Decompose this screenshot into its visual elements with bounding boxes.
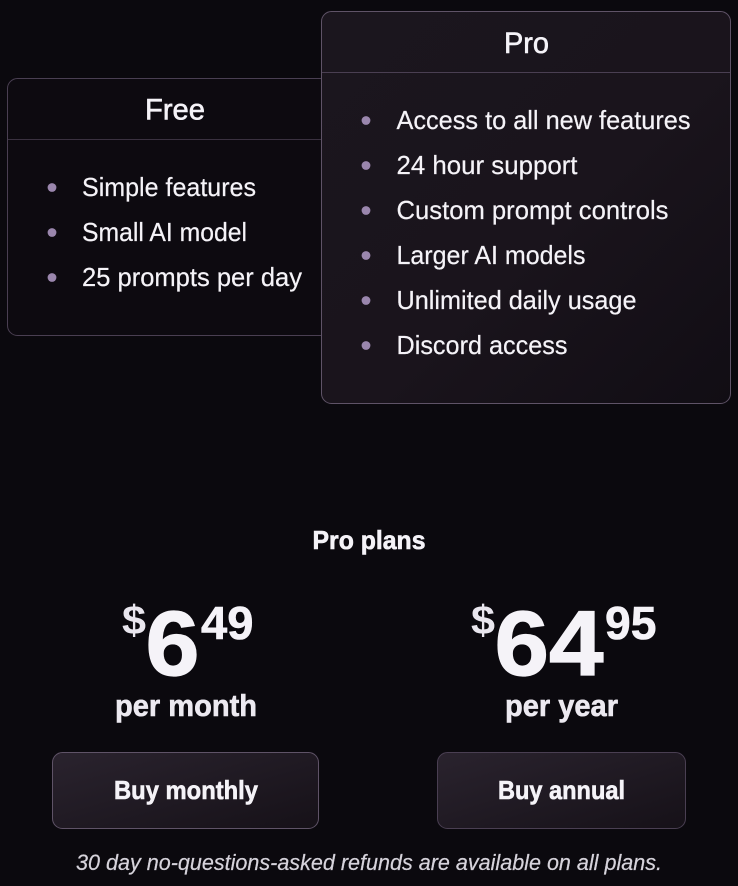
- price: annual: $: [471, 597, 495, 643]
- pro features list: Custom prompt controls: [396, 195, 668, 225]
- free features list: Simple features: [82, 172, 256, 202]
- label: per year: per year: [505, 688, 618, 723]
- button: buy monthly: Buy monthly: [114, 775, 258, 805]
- price: annual: 64: [494, 593, 604, 695]
- label: per month: per month: [115, 688, 257, 723]
- button: buy annual: [438, 752, 686, 828]
- price: monthly: 6: [146, 593, 200, 695]
- free features list: [48, 172, 302, 292]
- pro features list: 24 hour support: [396, 150, 578, 180]
- price: annual: [471, 593, 656, 695]
- price: monthly: 49: [201, 597, 254, 649]
- heading: free: Free: [145, 94, 205, 126]
- panel: pro plan: [322, 12, 730, 404]
- footnote: refunds: 30 day no-questions-asked refunds are available on all plans.: [76, 850, 662, 875]
- free features list: Small AI model: [82, 217, 247, 247]
- heading: pro plans: Pro plans: [312, 525, 426, 555]
- free features list: 25 prompts per day: [82, 262, 302, 292]
- pro features list: [362, 105, 690, 360]
- price: monthly: [122, 593, 254, 695]
- button: buy monthly: [52, 752, 318, 828]
- panel: free plan: [8, 78, 348, 336]
- pro features list: Discord access: [396, 330, 568, 360]
- price: annual: 95: [605, 597, 656, 649]
- price: monthly: $: [122, 597, 146, 643]
- pro features list: Access to all new features: [396, 105, 690, 135]
- button: buy annual: Buy annual: [498, 775, 625, 805]
- heading: pro: Pro: [504, 27, 549, 60]
- pro features list: Unlimited daily usage: [396, 285, 636, 315]
- pro features list: Larger AI models: [396, 240, 586, 270]
